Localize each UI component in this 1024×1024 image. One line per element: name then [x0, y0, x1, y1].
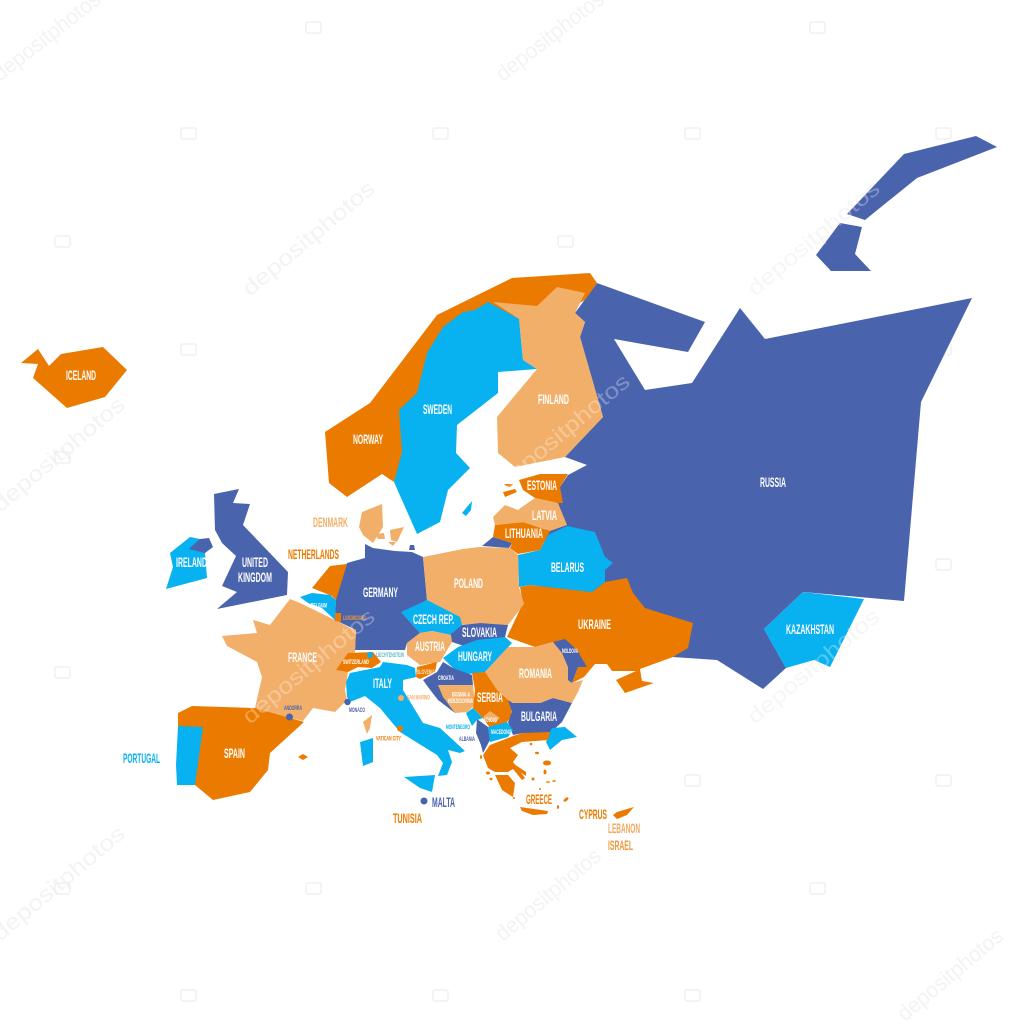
country: Albania	[459, 719, 490, 753]
country: Lithuania	[493, 522, 550, 554]
country: Bosnia and Herzegovina: HERZEGOVINA	[448, 698, 473, 705]
watermark background: depositphotos	[892, 923, 1008, 1024]
microstate: Vatican City: VATICAN CITY	[376, 736, 401, 742]
country: Lithuania: LITHUANIA	[505, 526, 543, 541]
country: Poland	[423, 547, 524, 625]
country: Germany	[335, 544, 427, 650]
watermark overlay: depositphotos	[237, 604, 380, 729]
country: Russia	[540, 136, 997, 689]
country: Belarus: BELARUS	[551, 559, 584, 575]
country: Malta	[420, 794, 455, 810]
map of Europe: ISRAEL	[608, 837, 633, 853]
map of Europe: LUXEMBOURG	[343, 615, 366, 622]
country: United Kingdom: KINGDOM	[238, 569, 272, 585]
country: Moldova	[553, 639, 587, 683]
country: Bosnia and Herzegovina	[438, 685, 475, 713]
microstate: Monaco: MONACO	[349, 707, 365, 714]
country: Sweden: SWEDEN	[423, 401, 452, 417]
country: Denmark	[313, 504, 404, 546]
watermark background: depositphotos	[237, 176, 380, 301]
microstate: Vatican City	[376, 726, 403, 742]
country: United Kingdom	[214, 489, 288, 609]
country: Liechtenstein	[367, 652, 404, 659]
country: Estonia: ESTONIA	[527, 477, 557, 493]
country: Finland: FINLAND	[538, 391, 569, 407]
country: Serbia	[472, 672, 512, 728]
country: Norway: NORWAY	[353, 431, 383, 447]
country: Macedonia	[488, 722, 513, 742]
country: Spain	[177, 706, 308, 800]
country: United Kingdom: UNITED	[242, 554, 268, 570]
watermark background: depositphotos	[742, 176, 885, 301]
watermark overlay	[237, 176, 885, 729]
watermark overlay: depositphotos	[742, 604, 885, 729]
country: Slovenia	[416, 662, 437, 679]
country: Liechtenstein: LIECHTENSTEIN	[376, 652, 404, 659]
country: Turkey	[546, 727, 577, 750]
country: Slovakia: SLOVAKIA	[462, 624, 497, 640]
country: Belgium	[300, 593, 336, 620]
country: Greece	[480, 732, 569, 815]
country: Croatia: CROATIA	[438, 675, 454, 682]
country: Montenegro	[446, 708, 483, 731]
island: Corsica	[363, 715, 372, 734]
country: Bulgaria: BULGARIA	[521, 708, 557, 724]
country: Netherlands	[288, 546, 347, 600]
country: France	[222, 599, 356, 721]
country: Ukraine	[507, 578, 693, 693]
microstate: Monaco	[344, 699, 365, 714]
country: Denmark: DENMARK	[313, 514, 348, 530]
country: Ireland: IRELAND	[176, 554, 207, 570]
watermark background: depositphotos	[742, 604, 885, 729]
country: Albania: ALBANIA	[459, 736, 475, 743]
country: Switzerland	[336, 652, 381, 672]
country: Switzerland: SWITZERLAND	[343, 659, 369, 666]
country: Ukraine: UKRAINE	[578, 616, 611, 632]
microstate: San Marino	[398, 694, 430, 702]
country: Austria: AUSTRIA	[415, 638, 445, 654]
country: Croatia	[423, 662, 473, 713]
country: Hungary: HUNGARY	[458, 648, 492, 664]
country: Kazakhstan	[764, 592, 864, 668]
region: Kaliningrad	[482, 537, 512, 548]
country: Spain: SPAIN	[224, 745, 245, 761]
country: Hungary	[443, 637, 512, 675]
country: Belgium: BELGIUM	[311, 602, 327, 610]
country: Bulgaria	[508, 698, 572, 735]
country: Czech Republic	[401, 600, 462, 635]
country: Russia: RUSSIA	[760, 474, 786, 490]
country: Kazakhstan: KAZAKHSTAN	[786, 621, 834, 637]
country: Kosovo	[483, 711, 500, 724]
country: Greece: GREECE	[526, 791, 552, 807]
microstate: San Marino: SAN MARINO	[407, 694, 430, 702]
country: Slovakia	[450, 623, 508, 647]
country: Montenegro: MONTENEGRO	[446, 724, 470, 731]
country: Moldova: MOLDOVA	[562, 648, 578, 655]
country: Ireland	[166, 537, 213, 589]
watermark background: depositphotos	[490, 843, 606, 946]
country: Slovenia: SLOVENIA	[417, 669, 435, 676]
country: Cyprus: CYPRUS	[579, 806, 607, 822]
country: Romania	[485, 642, 583, 703]
country: Portugal	[123, 726, 203, 785]
watermark overlay: depositphotos	[742, 176, 885, 301]
country: France: FRANCE	[288, 649, 317, 665]
country: Andorra: ANDORRA	[284, 705, 302, 712]
label: Tunisia: TUNISIA	[393, 810, 422, 826]
map of Europe	[21, 136, 997, 853]
country: Andorra	[284, 705, 302, 720]
country: Latvia	[493, 498, 567, 531]
country: Czech Republic: CZECH REP.	[413, 611, 454, 627]
country: Latvia: LATVIA	[532, 508, 557, 523]
country: Netherlands: NETHERLANDS	[288, 546, 339, 562]
country: Macedonia: MACEDONIA	[491, 729, 512, 736]
country: Iceland	[21, 347, 127, 408]
country: Poland: POLAND	[454, 575, 483, 591]
watermark overlay: depositphotos	[492, 369, 635, 494]
country: Italy	[346, 662, 465, 792]
country: Serbia: SERBIA	[477, 689, 503, 705]
country: Iceland: ICELAND	[66, 367, 96, 383]
country: Austria	[407, 631, 452, 665]
country: Germany: GERMANY	[363, 584, 398, 600]
country: Romania: ROMANIA	[519, 665, 552, 681]
country: Finland	[493, 287, 603, 467]
country: Luxembourg	[335, 613, 366, 622]
country: Norway	[325, 273, 597, 497]
country: Sweden	[394, 302, 537, 534]
map of Europe: MALTA	[432, 794, 455, 810]
country: Portugal: PORTUGAL	[123, 750, 160, 766]
map of Europe: LEBANON	[608, 820, 640, 836]
country: Bosnia and Herzegovina: BOSNIA &	[452, 692, 470, 698]
country: Belarus	[518, 526, 613, 592]
country: Estonia	[503, 474, 568, 503]
country: Kosovo: KOSOVO	[484, 717, 497, 724]
country: Italy: ITALY	[373, 675, 392, 691]
